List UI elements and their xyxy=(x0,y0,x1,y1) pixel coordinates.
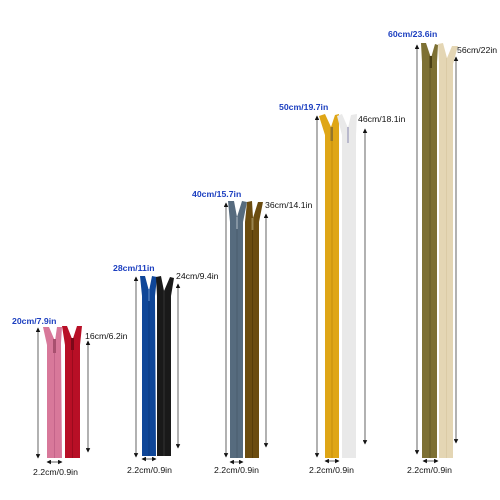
label: 20cm length: 20cm/7.9in xyxy=(12,316,56,326)
zipper: red xyxy=(62,326,82,458)
group: 20cm zippers xyxy=(12,316,128,477)
zipper: olive xyxy=(421,43,438,458)
group: 60cm zippers xyxy=(388,29,497,475)
zipper: white xyxy=(337,114,357,458)
height arrow: 28cm xyxy=(135,277,137,457)
zipper: brown xyxy=(245,201,263,458)
label: width: 2.2cm/0.9in xyxy=(214,465,259,475)
label: 50cm length: 50cm/19.7in xyxy=(279,102,328,112)
group: 28cm zippers xyxy=(113,263,219,475)
label: width: 2.2cm/0.9in xyxy=(127,465,172,475)
label: 40cm length: 40cm/15.7in xyxy=(192,189,241,199)
width arrow xyxy=(142,458,156,460)
height arrow: 16cm xyxy=(87,341,89,452)
height arrow: 20cm xyxy=(37,328,39,458)
zipper: yellow xyxy=(319,114,339,458)
width arrow xyxy=(423,460,438,462)
height arrow: 50cm xyxy=(316,116,318,457)
label: 24cm length: 24cm/9.4in xyxy=(176,271,219,281)
label: 28cm length: 28cm/11in xyxy=(113,263,155,273)
group: 40cm zippers xyxy=(192,189,312,475)
height arrow: 36cm xyxy=(265,214,267,447)
zipper: slate xyxy=(228,201,247,458)
height arrow: 24cm xyxy=(177,284,179,448)
label: width: 2.2cm/0.9in xyxy=(33,467,78,477)
height arrow: 46cm xyxy=(364,129,366,444)
label: 60cm length: 60cm/23.6in xyxy=(388,29,437,39)
label: 56cm length: 56cm/22in xyxy=(457,45,497,55)
label: 36cm length: 36cm/14.1in xyxy=(265,200,312,210)
width arrow xyxy=(230,461,243,463)
label: width: 2.2cm/0.9in xyxy=(309,465,354,475)
label: width: 2.2cm/0.9in xyxy=(407,465,452,475)
zipper: blue xyxy=(140,276,157,456)
height arrow: 60cm xyxy=(416,45,418,454)
zipper: beige xyxy=(438,43,458,458)
height arrow: 40cm xyxy=(225,203,227,457)
width arrow xyxy=(325,460,339,462)
zipper: black xyxy=(156,276,174,456)
group: 50cm zippers xyxy=(279,102,405,475)
label: 16cm length: 16cm/6.2in xyxy=(85,331,128,341)
width arrow xyxy=(47,461,62,463)
label: 46cm length: 46cm/18.1in xyxy=(358,114,405,124)
zipper: pink xyxy=(43,327,62,458)
height arrow: 56cm xyxy=(455,57,457,443)
